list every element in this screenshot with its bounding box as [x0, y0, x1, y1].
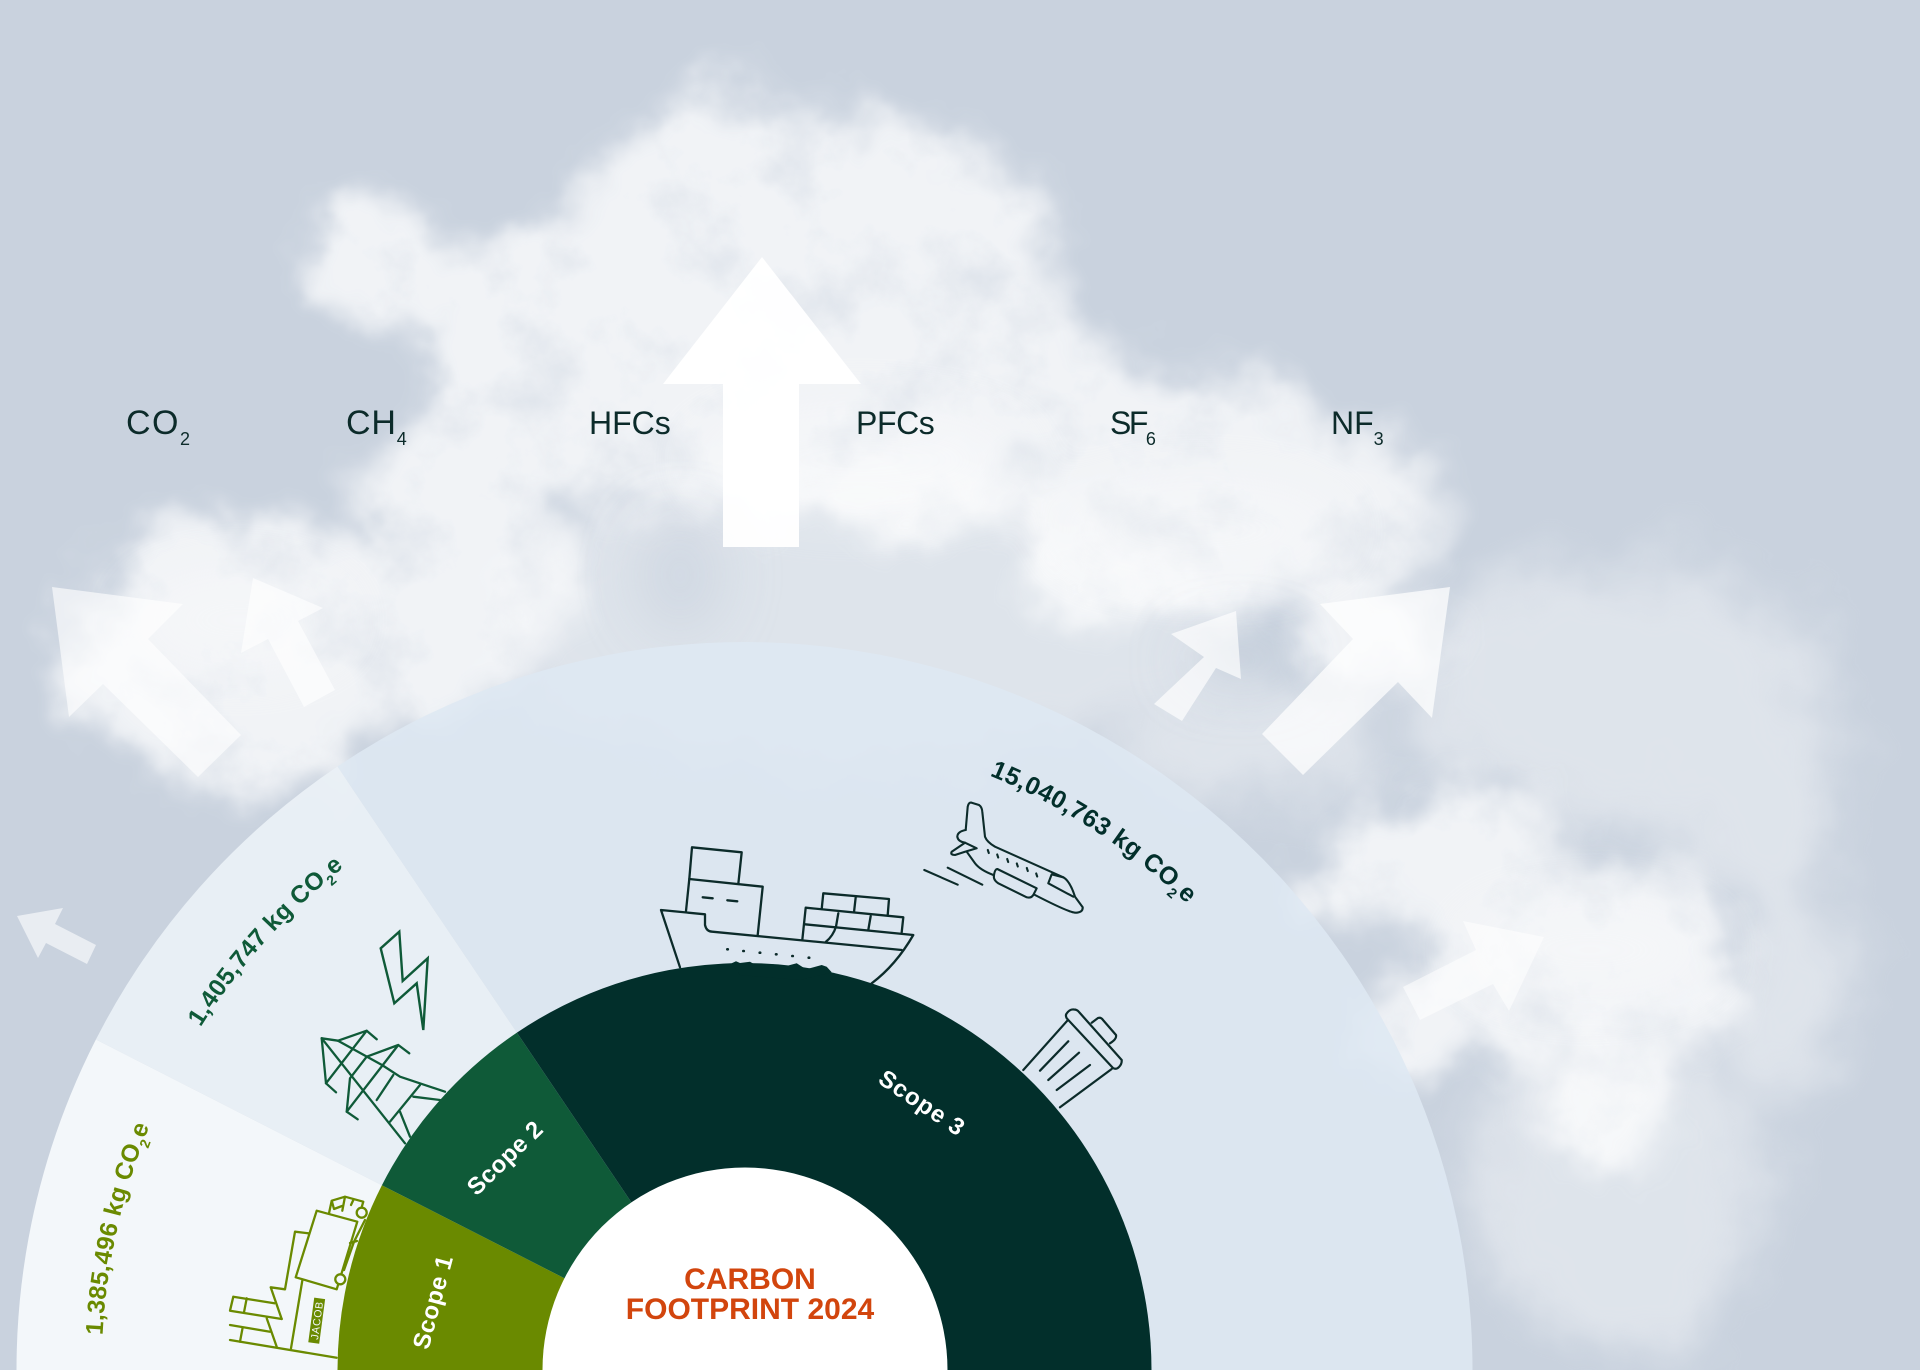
value: scope 3: e: [1180, 888, 1194, 902]
arrow: lower right: [1403, 921, 1544, 1020]
value: scope 2: 1,405,747 kg CO: [190, 872, 323, 1026]
arrow: small right: [1154, 611, 1241, 721]
sector: scope 1: [16, 1040, 744, 1370]
left mass: [355, 420, 545, 600]
arrow: small left: [17, 908, 96, 964]
value: scope 2: e: [328, 860, 342, 873]
label: CO2: 2: [180, 429, 192, 449]
donut ring: [338, 961, 1152, 1370]
scope 2 label: Scope 2: [462, 1116, 549, 1201]
icon: lightning bolt: [381, 932, 428, 1030]
arrow: second left: [241, 578, 335, 707]
label: PFCs: PFCs: [856, 405, 934, 441]
arrow: big left: [52, 587, 241, 777]
ring segment: scope 1: [338, 1185, 744, 1370]
label: CH4: 4: [397, 429, 408, 449]
value: scope 3: 2: [1166, 888, 1177, 899]
waves under ship: [732, 961, 832, 980]
label: NF3: NF: [1331, 405, 1374, 441]
icon: electricity pylon: [322, 1031, 445, 1143]
ring segment: scope 3: [517, 963, 1152, 1370]
icon: airplane: [924, 803, 1083, 913]
sector: scope 2: [96, 766, 744, 1370]
title: FOOTPRINT 2024: [626, 1293, 875, 1326]
icon: truck: [230, 1197, 367, 1358]
value: scope 1: e: [134, 1124, 148, 1136]
label: SF6: 6: [1146, 429, 1156, 449]
value: scope 2: 2: [326, 875, 337, 886]
arrow: central up: [663, 257, 861, 547]
sector: scope 3: [337, 642, 1472, 1370]
value: scope 1: 1,385,496 kg CO: [86, 1144, 139, 1334]
JACOB logo: JACOB: [309, 1301, 326, 1340]
label: NF3: 3: [1374, 429, 1384, 449]
icon: container ship: [661, 847, 913, 983]
title: CARBON: [684, 1263, 816, 1296]
ring segment: scope 2: [382, 1033, 744, 1370]
gas labels: [126, 404, 1384, 449]
label: CO2: CO: [126, 404, 180, 442]
outer fan: [16, 642, 1472, 1370]
right mass: [1020, 330, 1160, 470]
lower right mass: [1380, 780, 1560, 920]
icon: trash bin: [1023, 1009, 1122, 1107]
label: SF6: SF: [1110, 405, 1146, 441]
arrow: big right: [1262, 587, 1450, 775]
scope 3 label: Scope 3: [873, 1065, 970, 1142]
scope 1 label: Scope 1: [408, 1252, 459, 1352]
label: CH4: CH: [346, 404, 397, 442]
value: scope 1: 2: [140, 1140, 151, 1148]
value: scope 3: 15,040,763 kg CO: [991, 762, 1178, 884]
center disc: [542, 1168, 948, 1370]
label: HFCs: HFCs: [589, 405, 671, 441]
upper main mass: [575, 95, 925, 345]
